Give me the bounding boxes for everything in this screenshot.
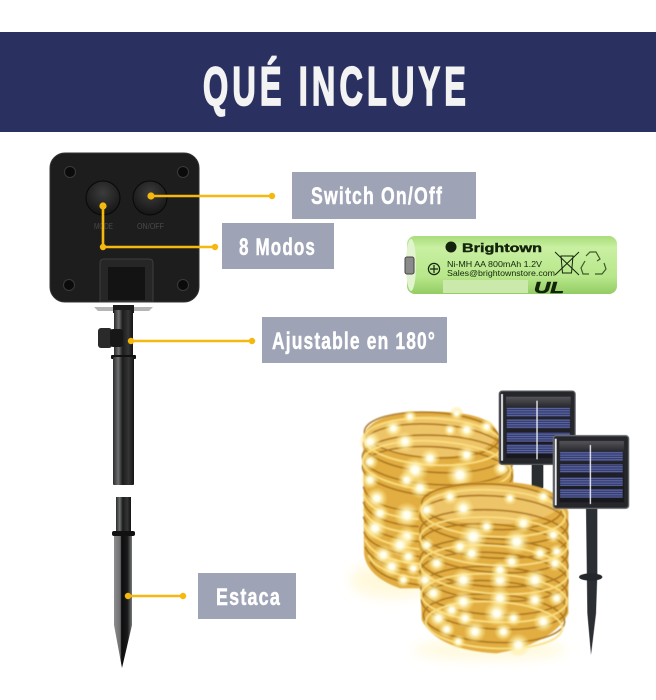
front solar panel — [553, 436, 629, 508]
bracket socket — [100, 259, 153, 302]
adjustable bracket and upper tube — [94, 305, 153, 485]
button caption: on/off: ON/OFF — [137, 222, 164, 231]
label: 8 modos — [222, 223, 334, 269]
line: modes — [103, 206, 215, 247]
front panel stake — [579, 508, 602, 655]
solar string lights — [350, 391, 629, 660]
on/off button — [133, 181, 167, 215]
rear solar panel — [499, 391, 575, 464]
line: switch — [151, 195, 272, 197]
callout lines — [103, 196, 272, 596]
label: estaca — [198, 573, 296, 619]
battery terminal — [405, 239, 416, 291]
label: switch on/off — [292, 172, 476, 219]
icon: UL mark: UL — [534, 280, 564, 297]
icon: corner screws — [64, 166, 188, 290]
line: stake — [128, 595, 183, 597]
callout dots — [99, 192, 275, 599]
ground glow — [350, 562, 567, 660]
label: ajustable: Ajustable en 180° — [272, 328, 436, 355]
mode button — [86, 181, 120, 215]
battery email: Sales@brightownstore.com — [447, 268, 555, 278]
battery spec: Ni-MH AA 800mAh 1.2V — [447, 259, 542, 269]
battery brand: Brightown — [462, 243, 542, 255]
icon: recycle — [581, 252, 606, 274]
rear light coil — [361, 409, 514, 588]
button caption: mode: MODE — [94, 222, 113, 231]
header band — [0, 32, 656, 132]
front light coil — [418, 480, 569, 653]
front coil lights — [416, 488, 565, 657]
label: estaca: Estaca — [216, 584, 281, 611]
ground stake — [112, 497, 135, 668]
icon: brand mark — [446, 242, 456, 252]
rear panel stake — [532, 462, 543, 488]
icon: bin crossed — [555, 252, 579, 275]
rear coil lights — [359, 406, 511, 587]
solar control box — [50, 153, 199, 302]
icon: plus — [428, 263, 440, 275]
label: ajustable — [262, 317, 447, 363]
blank patch — [443, 280, 528, 293]
title: QUÉ INCLUYE — [203, 55, 470, 117]
label: 8 modos: 8 Modos — [239, 234, 316, 261]
battery — [405, 236, 617, 297]
label: switch on/off: Switch On/Off — [311, 183, 443, 210]
line: adjustable — [131, 340, 252, 342]
